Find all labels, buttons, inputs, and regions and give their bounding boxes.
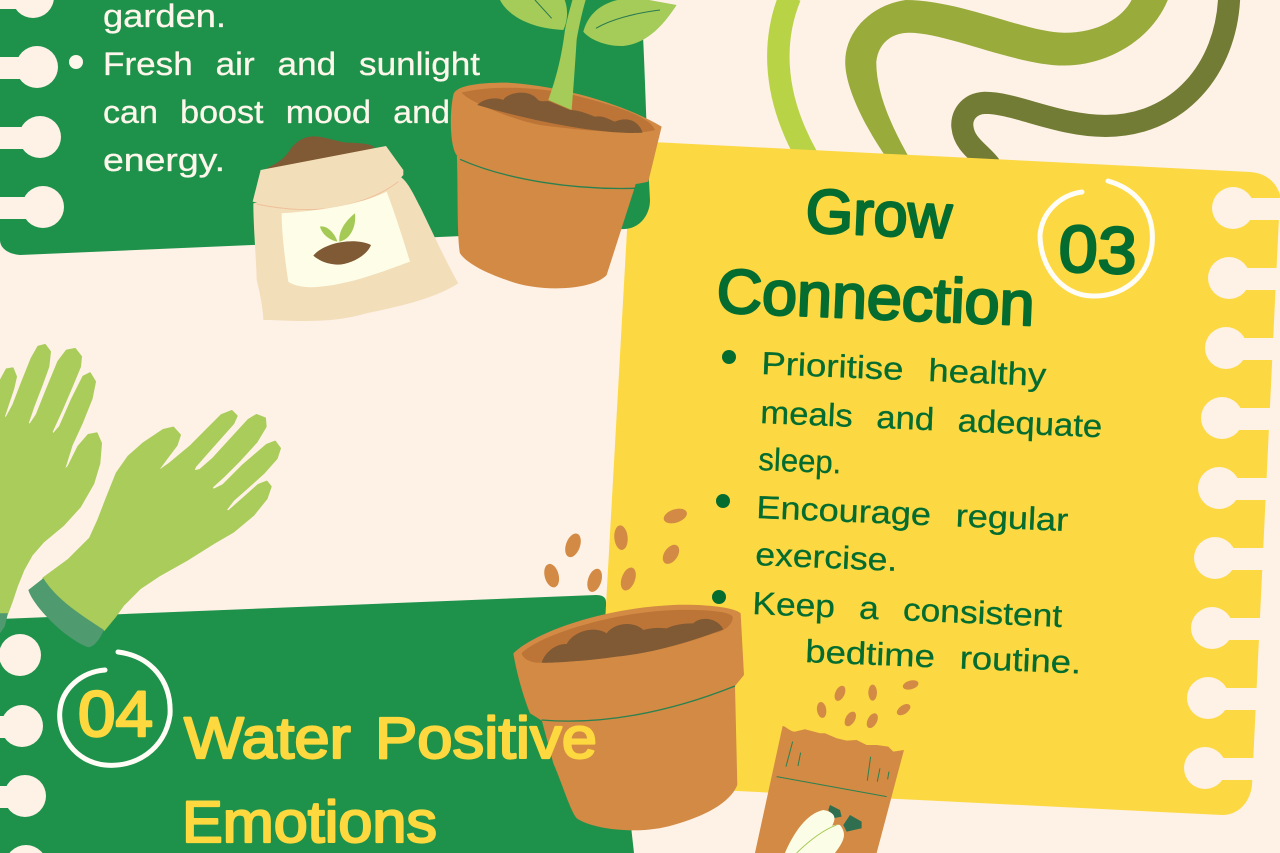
panel: yellow note 03 (596, 141, 1280, 815)
notebook holes: bottom green note (0, 634, 47, 853)
text: top note bullets: Fresh air and sunlight (103, 46, 480, 82)
icon: soil bag (253, 136, 458, 321)
panel: bottom green note (0, 595, 634, 853)
text: top note bullets: can boost mood and (103, 94, 450, 130)
heading: Grow Connection (715, 177, 1036, 339)
text: yellow note bullets: sleep. (758, 441, 842, 480)
heading: Water Positive Emotions (182, 706, 597, 853)
text: yellow note bullets: Prioritise healthy (761, 345, 1047, 393)
heading: Water Positive Emotions: Water Positive (184, 706, 597, 771)
heading: Grow Connection: Grow (804, 177, 953, 252)
text: top note bullets (69, 0, 480, 178)
icon: soil bag and potted seedling (253, 0, 677, 321)
number badge 04 (60, 652, 170, 765)
icon: falling seeds (542, 506, 919, 730)
text: yellow note bullets: Keep a consistent (752, 585, 1063, 634)
notebook holes: yellow note (1184, 187, 1280, 789)
icon: terracotta pot (513, 605, 744, 830)
text: yellow note bullets: Encourage regular (756, 489, 1069, 538)
number badge 03: 03 (1058, 211, 1138, 288)
panel: top green note (0, 0, 650, 255)
number badge 03 (1040, 181, 1152, 296)
text: yellow note bullets: bedtime routine. (805, 633, 1082, 681)
icon: gardening gloves (0, 345, 280, 647)
text: yellow note bullets (712, 345, 1103, 681)
heading: Grow Connection: Connection (715, 257, 1036, 339)
icon: terracotta pot, seeds and seed packet (513, 506, 919, 853)
decorative squiggle lines (778, 0, 1229, 166)
number badge 04: 04 (78, 678, 153, 750)
icon: seed packet (755, 726, 904, 853)
text: yellow note bullets: meals and adequate (760, 394, 1103, 444)
notebook holes: top green note (0, 0, 64, 228)
icon: potted seedling (451, 0, 677, 288)
text: yellow note bullets: exercise. (755, 536, 898, 578)
text: top note bullets: energy. (103, 142, 225, 178)
